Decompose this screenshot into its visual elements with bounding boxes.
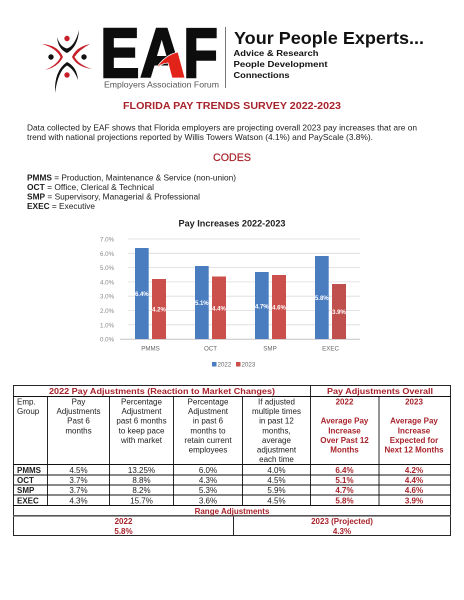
row: EXEC: 4.3% (69, 496, 88, 506)
range 2023 projected: 2023 (Projected) (311, 517, 373, 526)
row: OCT: 8.8% (132, 476, 151, 485)
column headers: past 6 months (116, 417, 167, 426)
bars: OCT: 5.1% (195, 301, 209, 307)
x axis labels: SMP (263, 346, 277, 352)
intro text block: Data collected by EAF shows that Florida employers are projecting overall 2023 pay increases that are on (27, 124, 417, 132)
column headers: Adjustments (56, 407, 101, 416)
column headers: Next 12 Months (384, 446, 444, 454)
column headers: Over Past 12 (320, 436, 369, 445)
bars: SMP (255, 272, 286, 339)
row: OCT: 4.5% (267, 476, 286, 485)
column headers: employees (189, 446, 227, 454)
column headers: Increase (398, 426, 431, 435)
row: EXEC (17, 496, 423, 506)
legend: 2022 (218, 362, 232, 368)
logo tagline: Employers Association Forum (104, 80, 219, 90)
row: SMP: 4.6% (405, 486, 423, 495)
column headers: Past 6 (67, 417, 90, 426)
row: SMP: 5.3% (199, 486, 217, 495)
row: SMP: 4.7% (335, 486, 354, 495)
table heading: pay adjustments overall: Pay Adjustments Overall (327, 386, 433, 396)
column headers (17, 398, 444, 464)
column headers: in past 12 (259, 417, 294, 426)
column headers: Expected for (390, 436, 438, 445)
column headers: 2023 (405, 398, 423, 406)
row: OCT: 3.7% (69, 476, 88, 485)
bars: EXEC: 3.9% (332, 310, 346, 316)
row: EXEC: 3.6% (199, 496, 217, 506)
x axis labels: OCT (204, 346, 217, 352)
bar chart: pay increases (100, 218, 360, 368)
logo: EAF emblem and wordmark (42, 14, 219, 93)
chart title: Pay Increases 2022-2023 (178, 218, 286, 230)
row: OCT (17, 476, 423, 485)
row: EXEC: 3.9% (405, 496, 423, 506)
column headers: If adjusted (258, 398, 295, 406)
row: PMMS: 6.0% (199, 466, 217, 475)
column headers: each time (259, 455, 294, 464)
row: PMMS: 4.0% (267, 466, 286, 475)
services list: People Development (234, 59, 328, 69)
column headers: months, (262, 426, 291, 435)
header tagline (234, 28, 424, 80)
grid lines and y axis: 7.0% (100, 236, 115, 244)
services list: Connections (234, 70, 290, 80)
bars: PMMS (135, 248, 166, 339)
wordmark: EAF: A (140, 14, 183, 92)
intro text block (27, 124, 417, 142)
row: PMMS: 13.25% (128, 466, 155, 475)
column headers: retain current (184, 436, 232, 445)
bars: PMMS: 4.2% (152, 308, 166, 314)
column headers: Months (330, 446, 359, 454)
column headers: in past 6 (193, 417, 224, 426)
wordmark: EAF (100, 14, 218, 92)
column headers: Emp. (17, 398, 36, 406)
range 2022: 5.8% (114, 527, 133, 536)
row: PMMS: 6.4% (335, 466, 354, 475)
x axis labels: PMMS (141, 346, 160, 352)
codes list: EXEC = Executive (27, 202, 95, 211)
services list: Advice & Research (234, 48, 318, 58)
row: SMP: 3.7% (69, 486, 88, 495)
column headers: Percentage (188, 398, 229, 406)
column headers: with market (120, 436, 163, 445)
bars: EXEC (315, 256, 346, 339)
column headers: Average Pay (321, 417, 369, 426)
range 2022 (114, 517, 133, 536)
title: FLORIDA PAY TRENDS SURVEY 2022-2023 (123, 100, 341, 112)
x axis labels (141, 346, 339, 352)
table heading: 2022 pay adjustments: 2022 Pay Adjustments (Reaction to Market Changes) (49, 386, 275, 396)
range 2023 projected (311, 517, 373, 536)
x axis labels: EXEC (322, 346, 339, 352)
grid lines and y axis: 0.0% (100, 336, 115, 344)
row: SMP: 8.2% (132, 486, 151, 495)
row: OCT: OCT (17, 476, 34, 485)
range 2023 projected: 4.3% (333, 527, 351, 536)
row: PMMS: PMMS (17, 466, 42, 475)
heading: codes: CODES (213, 152, 251, 164)
column headers: to keep pace (119, 426, 165, 435)
column headers: Percentage (121, 398, 163, 406)
column headers: Pay (72, 398, 85, 406)
table: pay adjustments (13, 386, 451, 536)
legend (212, 362, 256, 368)
services list (234, 48, 328, 80)
divider line in header (225, 27, 226, 88)
row: EXEC: 5.8% (335, 496, 354, 506)
column headers: average (262, 436, 292, 445)
bars: OCT (195, 266, 226, 339)
range adjustments heading: Range Adjustments (195, 507, 270, 516)
codes list: SMP = Supervisory, Managerial & Professional (27, 192, 200, 202)
row: EXEC: 15.7% (130, 496, 153, 506)
column headers: Average Pay (390, 417, 438, 426)
icon: four figures emblem (42, 30, 92, 93)
grid lines and y axis: 4.0% (100, 279, 115, 286)
row: PMMS (17, 466, 423, 475)
column headers: Group (17, 407, 40, 416)
bars: SMP: 4.6% (272, 306, 286, 312)
row: SMP (17, 486, 423, 495)
column headers: months (65, 426, 92, 435)
codes list: OCT = Office, Clerical & Technical (27, 183, 154, 192)
bars: EXEC: 5.8% (315, 296, 329, 302)
row: OCT: 4.3% (199, 476, 217, 485)
row: EXEC: EXEC (17, 496, 39, 506)
bars: PMMS: 6.4% (135, 292, 149, 298)
row: OCT: 5.1% (335, 476, 354, 485)
table grid (13, 386, 451, 536)
legend: 2023 (242, 362, 256, 368)
row: SMP: SMP (17, 486, 35, 495)
column headers: Adjustment (188, 407, 229, 416)
row: PMMS: 4.5% (69, 466, 88, 475)
intro text block: trend with national projections reported by Willis Towers Watson (4.1%) and PayScale (3.8%). (27, 133, 373, 142)
grid lines and y axis: 5.0% (100, 265, 115, 272)
column headers: multiple times (252, 407, 301, 416)
row: EXEC: 4.5% (267, 496, 286, 506)
row: OCT: 4.4% (405, 476, 423, 485)
row: SMP: 5.9% (267, 486, 286, 495)
column headers: Adjustment (121, 407, 162, 416)
bars: OCT: 4.4% (212, 306, 226, 312)
grid lines and y axis: 2.0% (100, 308, 115, 315)
column headers: adjustment (257, 446, 297, 454)
codes list: PMMS = Production, Maintenance & Service (non-union) (27, 174, 236, 182)
grid lines and y axis: 6.0% (100, 251, 115, 258)
wordmark: EAF: E (100, 14, 139, 92)
column headers: Increase (328, 426, 361, 435)
grid lines and y axis: 3.0% (100, 294, 115, 301)
row: PMMS: 4.2% (405, 466, 423, 475)
grid lines and y axis: 1.0% (100, 322, 115, 329)
bars: SMP: 4.7% (255, 304, 269, 310)
codes list (27, 174, 236, 211)
wordmark: EAF: F (184, 15, 218, 92)
column headers: months to (190, 426, 226, 435)
column headers: 2022 (336, 398, 354, 406)
grid lines and y axis (100, 236, 360, 344)
range 2022: 2022 (115, 517, 133, 526)
slogan: Your People Experts... (234, 28, 424, 48)
